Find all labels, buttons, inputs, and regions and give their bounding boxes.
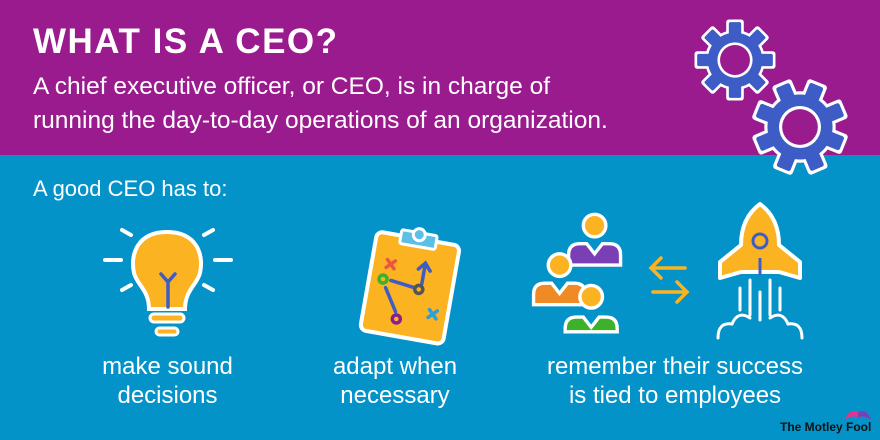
label: employees: remember their success [547, 353, 803, 380]
title: WHAT IS A CEO? [33, 22, 339, 61]
header band [0, 0, 880, 155]
icon: clipboard [358, 227, 461, 346]
subtitle [33, 73, 608, 134]
subtitle: running the day-to-day operations of an organization. [33, 107, 608, 134]
icon: rocket [716, 202, 804, 340]
label: decisions [102, 353, 233, 409]
icon: lightbulb [103, 228, 233, 336]
icon: employees [532, 212, 622, 334]
label: decisions: make sound [102, 353, 233, 380]
icon: exchange arrows [648, 256, 690, 304]
label: decisions: decisions [117, 382, 218, 409]
icon: jester hat [845, 411, 871, 420]
label: adapt: necessary [340, 382, 450, 409]
label: employees: is tied to employees [569, 382, 781, 409]
lead text: A good CEO has to: [33, 176, 227, 201]
subtitle: A chief executive officer, or CEO, is in charge of [33, 73, 550, 100]
label: employees [547, 353, 803, 409]
label: adapt: adapt when [333, 353, 457, 380]
logo: The Motley Fool [780, 420, 871, 434]
label: adapt [333, 353, 457, 409]
